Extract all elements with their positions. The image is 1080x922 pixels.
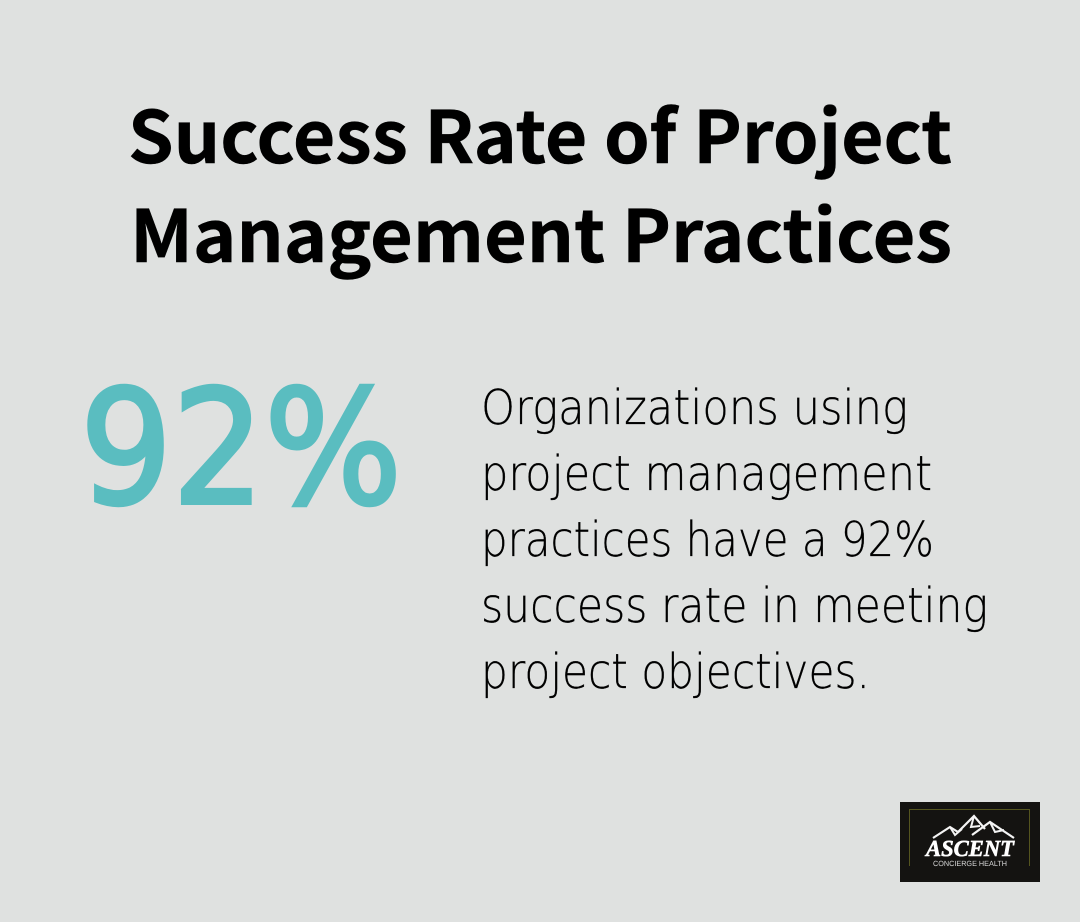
- description text: practices have a 92%: [481, 512, 934, 568]
- description text: project management: [481, 446, 932, 502]
- icon: mountains: [933, 816, 1014, 838]
- title: Success Rate of Project: [128, 79, 952, 184]
- logo: Ascent Concierge Health: [900, 802, 1040, 882]
- logo: Ascent Concierge Health: CONCIERGE HEALTH: [933, 859, 1007, 868]
- description text: project objectives.: [481, 644, 870, 700]
- big stat: 92%: 92%: [80, 357, 402, 541]
- logo: Ascent Concierge Health: ASCENT: [924, 836, 1015, 861]
- description text: success rate in meeting: [481, 578, 988, 634]
- title: [128, 79, 952, 283]
- description text: Organizations using: [481, 380, 908, 436]
- description text: [481, 380, 988, 700]
- title: Management Practices: [130, 178, 952, 283]
